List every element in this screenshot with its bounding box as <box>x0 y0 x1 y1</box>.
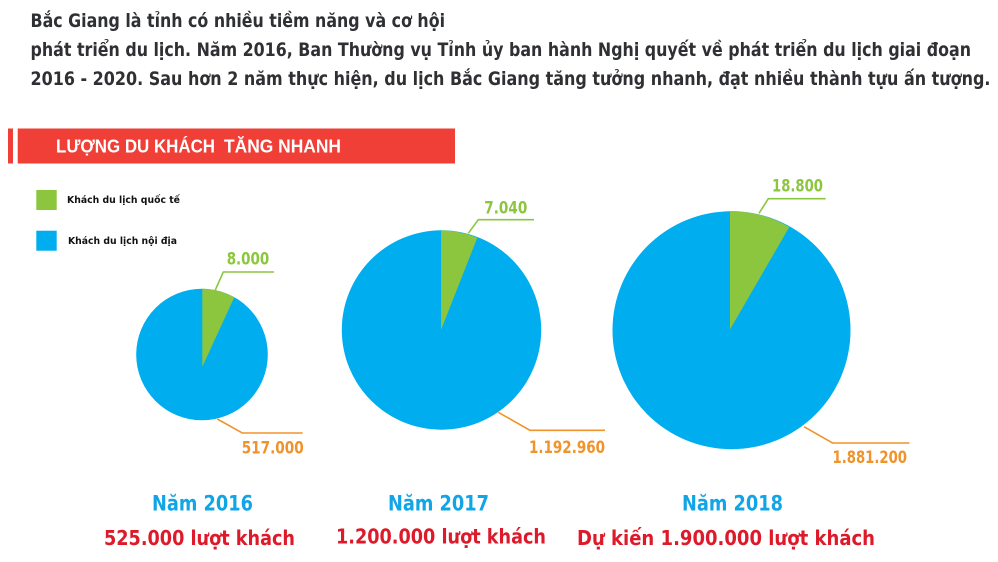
legend item: domestic visitors: Khách du lịch nội địa <box>68 235 177 247</box>
pie chart 2017: 7.040 <box>484 198 527 217</box>
pie chart 2016: 8.000 <box>227 250 269 268</box>
section heading banner: LƯỢNG DU KHÁCH <box>56 136 215 156</box>
intro text <box>30 9 990 90</box>
year labels: Năm 2017 <box>388 492 489 516</box>
visitor totals: 1.200.000 lượt khách <box>336 524 546 548</box>
pie chart 2018 <box>612 176 910 467</box>
visitor totals <box>104 524 875 550</box>
section heading banner: TĂNG NHANH <box>224 136 341 156</box>
intro text: Bắc Giang là tỉnh có nhiều tiềm năng và cơ hội <box>30 9 445 32</box>
year labels: Năm 2018 <box>682 492 783 516</box>
visitor totals: Dự kiến 1.900.000 lượt khách <box>577 526 875 550</box>
legend item: domestic visitors <box>36 231 177 251</box>
legend item: international visitors: Khách du lịch quốc tế <box>67 193 180 206</box>
legend item: international visitors <box>36 190 180 210</box>
year labels: Năm 2016 <box>152 492 253 516</box>
visitor totals: 525.000 lượt khách <box>104 526 295 550</box>
pie chart 2018: 1.881.200 <box>832 448 907 467</box>
pie chart 2017 <box>342 198 605 457</box>
section heading banner <box>8 128 455 164</box>
year labels <box>152 492 783 516</box>
pie chart 2016: 517.000 <box>242 438 304 458</box>
legend <box>36 190 180 251</box>
pie chart 2018: 18.800 <box>772 176 823 196</box>
pie chart 2017: 1.192.960 <box>529 438 605 457</box>
pie chart 2016 <box>136 250 304 458</box>
